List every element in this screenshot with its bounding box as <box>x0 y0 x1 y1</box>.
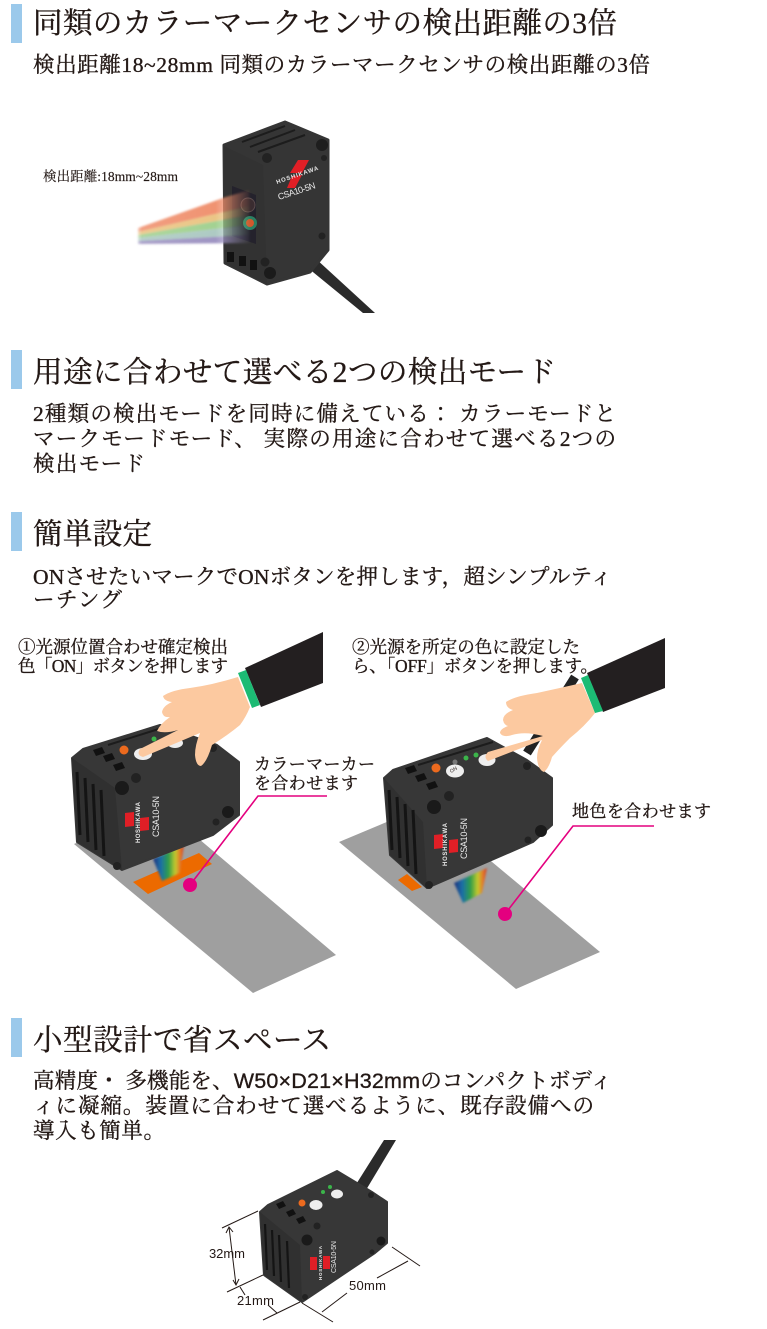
gray sheet <box>339 806 600 989</box>
step 2 caption: ②光源を所定の色に設定した <box>352 637 580 657</box>
spectrum <box>153 845 184 881</box>
step 1 caption <box>18 637 228 676</box>
logo <box>310 1257 317 1270</box>
section 2 description: マークモードモード、 実際の用途に合わせて選べる2つの <box>33 427 616 451</box>
sensor: HOSHIKAWA <box>136 801 142 843</box>
step 2 caption <box>352 637 598 676</box>
detection distance label: 検出距離:18mm~28mm <box>43 168 178 184</box>
section 4 description: 高精度・ 多機能を、W50×D21×H32mmのコンパクトボディ <box>33 1069 612 1093</box>
callout: color marker: カラーマーカー <box>254 755 375 774</box>
hand <box>486 638 665 772</box>
logo and model: HOSHIKAWA <box>276 166 320 186</box>
sensor: ON <box>449 766 459 775</box>
callout: background color <box>498 802 711 921</box>
light beam <box>138 190 250 244</box>
sensor: CSA10-5N <box>151 796 161 837</box>
sensor body <box>224 122 328 284</box>
dimension labels: 50mm <box>349 1278 386 1293</box>
cable <box>527 677 575 753</box>
section 3 description: ーチング <box>33 588 122 612</box>
section 3 description: ONさせたいマークでONボタンを押します，超シンプルティ <box>33 565 612 590</box>
dimension labels <box>209 1246 386 1308</box>
logo <box>434 834 443 849</box>
dimension lines <box>222 1211 420 1322</box>
step 2 caption: ら、「OFF」ボタンを押します。 <box>352 656 598 676</box>
sensor <box>260 1171 387 1302</box>
section 3 description <box>33 565 612 612</box>
section 2 description: 検出モード <box>33 452 145 476</box>
section 3 heading <box>11 512 152 551</box>
section 2 description <box>33 402 616 476</box>
callout: color marker <box>183 755 375 892</box>
callout: background color: 地色を合わせます <box>572 802 711 821</box>
lens window <box>232 186 257 244</box>
step 1 caption: ①光源位置合わせ確定検出 <box>18 637 228 657</box>
hand <box>139 632 323 766</box>
logo and model <box>276 160 320 202</box>
section 2 description: 2種類の検出モードを同時に備えている： カラーモードと <box>33 402 616 426</box>
section 3 heading: 簡単設定 <box>33 518 152 551</box>
callout: color marker: を合わせます <box>254 774 358 793</box>
cable <box>355 1140 396 1190</box>
dimension labels: 32mm <box>209 1246 245 1261</box>
sensor: HOSHIKAWA <box>443 822 449 866</box>
sensor photo with light beam <box>138 122 375 313</box>
section 4 description: ィに凝縮。装置に合わせて選べるように、既存設備への <box>33 1094 594 1118</box>
step 1 caption: 色「ON」ボタンを押します <box>18 656 228 676</box>
step 1 illustration <box>72 632 336 993</box>
dimension labels: 21mm <box>237 1293 274 1308</box>
sensor <box>72 725 239 870</box>
spectrum <box>454 868 487 903</box>
orange marker <box>133 853 212 894</box>
section 2 heading: 用途に合わせて選べる2つの検出モード <box>33 356 556 389</box>
section 1 heading: 同類のカラーマークセンサの検出距離の3倍 <box>33 7 617 40</box>
gray sheet <box>74 806 336 993</box>
orange marker <box>398 874 422 891</box>
sensor <box>384 738 552 889</box>
section 4 description <box>33 1069 612 1143</box>
logo <box>125 812 134 827</box>
sensor: HOSHIKAWA <box>318 1245 323 1280</box>
section 4 description: 導入も簡単。 <box>33 1119 165 1143</box>
sensor: CSA10-5N <box>459 818 469 859</box>
step 2 illustration <box>339 638 665 989</box>
sensor: CSA10-5N <box>331 1241 338 1273</box>
section 1 description: 検出距離18~28mm 同類のカラーマークセンサの検出距離の3倍 <box>33 53 650 77</box>
logo and model: CSA10-5N <box>277 180 317 202</box>
section 4 heading: 小型設計で省スペース <box>33 1024 331 1057</box>
cable <box>308 258 375 313</box>
dimension sensor illustration <box>209 1140 420 1322</box>
